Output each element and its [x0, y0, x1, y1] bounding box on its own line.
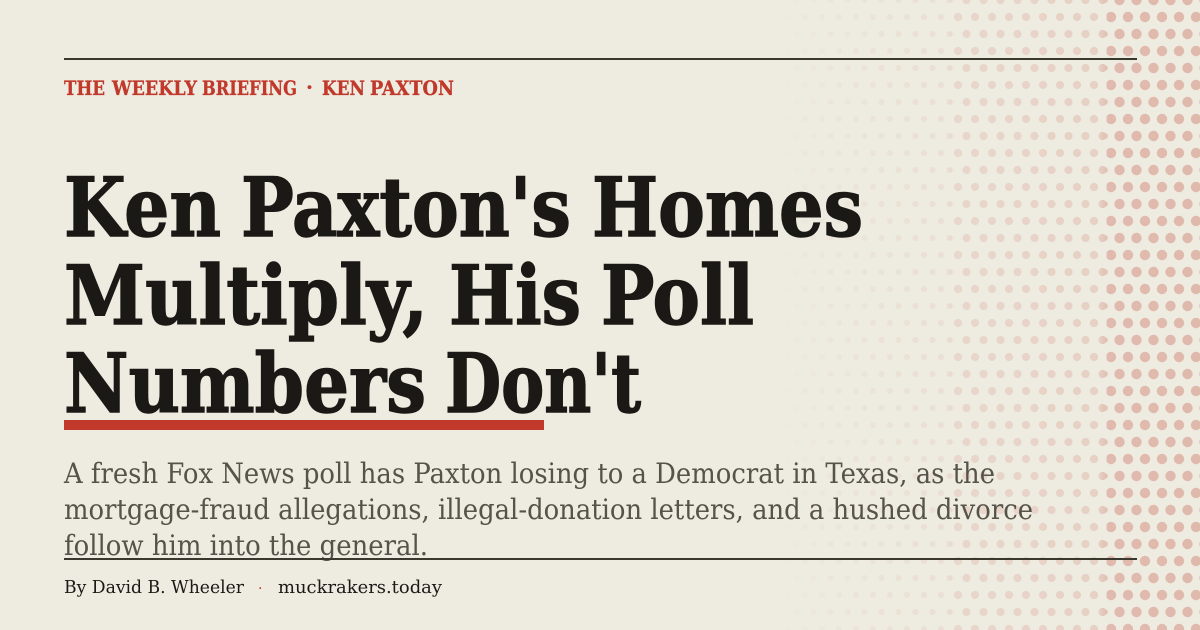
title	[64, 161, 863, 432]
title: Ken	[64, 161, 221, 256]
title: His	[449, 249, 581, 344]
title: Numbers	[64, 337, 426, 432]
subtitle	[63, 457, 1033, 562]
title accent underline	[64, 420, 544, 430]
halftone dot pattern	[870, 0, 1200, 630]
kicker: THE	[64, 76, 105, 100]
kicker: BRIEFING	[202, 76, 297, 100]
title: Poll	[601, 249, 754, 344]
kicker: PAXTON	[370, 76, 454, 100]
byline: muckrakers.today	[278, 577, 443, 598]
title: Don't	[445, 337, 641, 432]
kicker: ·	[306, 75, 313, 99]
byline	[64, 577, 443, 598]
byline: By David B. Wheeler	[64, 577, 244, 598]
top rule	[64, 58, 1137, 60]
kicker: KEN	[322, 76, 365, 100]
subtitle: A fresh Fox News poll has Paxton losing to a Democrat in Texas, as the	[63, 457, 995, 490]
bottom rule	[64, 558, 1137, 560]
kicker	[64, 75, 454, 100]
title: Multiply,	[64, 249, 428, 344]
title: Homes	[592, 161, 863, 256]
byline: ·	[258, 581, 262, 597]
title: Paxton's	[241, 161, 571, 256]
subtitle: follow him into the general.	[64, 529, 428, 562]
subtitle: mortgage-fraud allegations, illegal-donation letters, and a hushed divorce	[64, 493, 1033, 526]
kicker: WEEKLY	[111, 76, 198, 100]
